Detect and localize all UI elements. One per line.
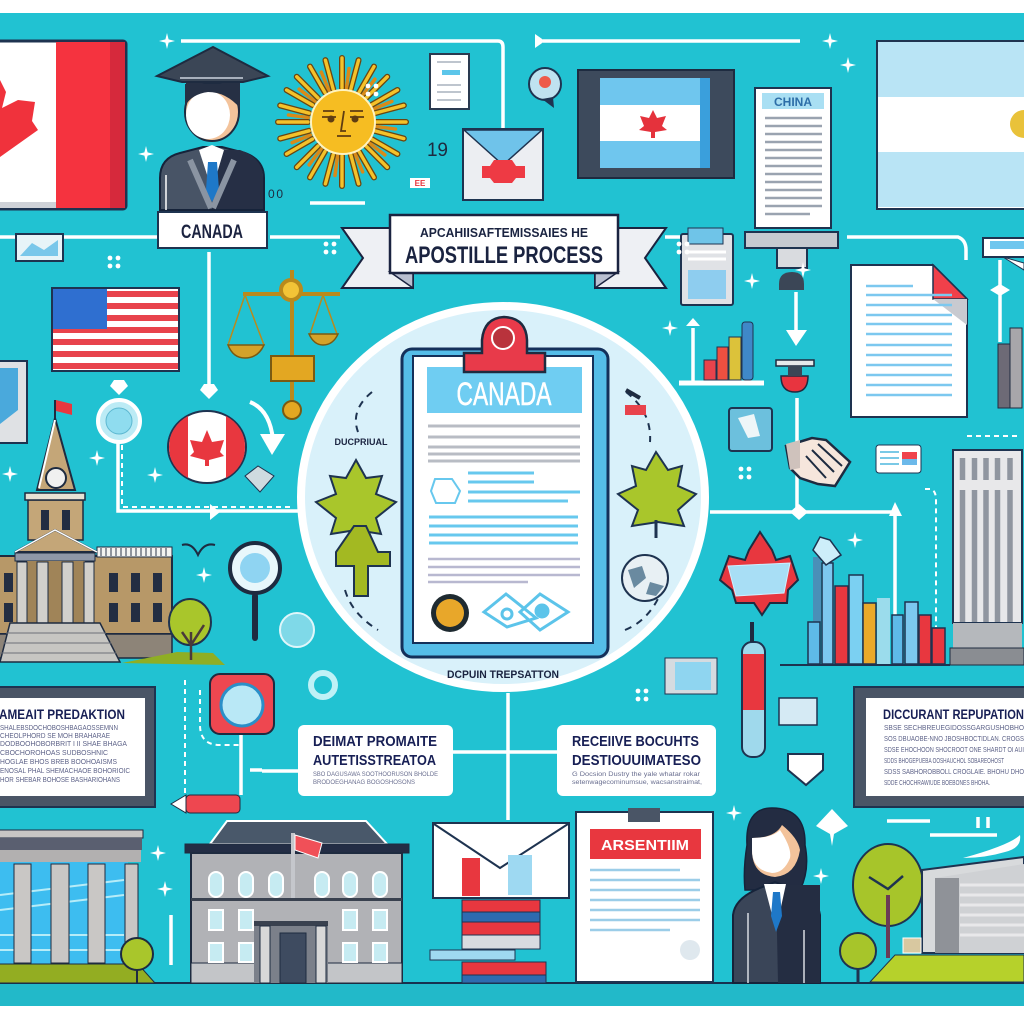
icon: dashed arcs — [345, 392, 662, 630]
icon: tree and lawn — [122, 599, 225, 665]
panel: document reputation text — [854, 687, 1024, 807]
text: stray figures: 00 — [268, 187, 283, 201]
panel: document page — [851, 265, 967, 417]
panel: document preparation text: HOR SHEBAR BOHOSE BASHARIOHANS — [0, 777, 120, 784]
icon: round bush — [121, 938, 153, 983]
icon: small document — [430, 54, 469, 109]
icon: lawn — [870, 955, 1024, 982]
icon: red tag — [625, 390, 646, 415]
panel: document on stand: CHINA — [774, 95, 812, 109]
panel: document promote text: AUTETISSTREATOA — [313, 752, 436, 769]
icon: magnifier — [230, 543, 280, 638]
panel: argentina clipboard: ARSENTIIM — [601, 837, 689, 854]
panel: argentina clipboard — [576, 808, 713, 982]
icon: embassy building — [185, 821, 409, 983]
icon: graduate figure — [157, 47, 268, 210]
clipboard clip — [464, 317, 545, 372]
panel: document promote text — [298, 725, 453, 796]
panel: document preparation text: ENOSAL PHAL SHEMACHAOE BOHORIOIC — [0, 768, 130, 775]
label: small red tag — [410, 178, 430, 188]
icon: location badge — [529, 68, 561, 108]
panel: clipboard document — [402, 317, 608, 657]
icon: books stack — [430, 900, 546, 983]
icon: gold seal — [431, 594, 469, 632]
panel: canada flag — [0, 41, 126, 209]
panel: document preparation text: SHALEBSDOCHOBOSHBAGAOSSEMNN — [0, 725, 118, 732]
panel: tower building — [950, 450, 1024, 665]
icon: sun of may — [278, 58, 406, 186]
icon: left maple leaf — [316, 460, 396, 596]
icon: scales of justice — [228, 270, 340, 419]
icon: government building with stairs — [0, 400, 172, 662]
icon: small globe — [280, 613, 314, 647]
icon: small diamond — [245, 466, 274, 492]
label: canada nameplate — [158, 212, 267, 248]
icon: small map card — [16, 234, 63, 261]
banner: canada — [427, 367, 582, 413]
icon: globe node — [98, 400, 140, 442]
panel: receive documents text: DESTIOUUIMATESO — [572, 752, 701, 769]
panel: document promote text: DEIMAT PROMAITE — [313, 733, 437, 750]
icon: map tile — [729, 408, 772, 451]
panel: receive documents text: setenwagecominumsue, wacsanstraimat, — [572, 779, 702, 786]
panel: document preparation text: CBOCHOROHOAS SUDBOSHNIC — [0, 750, 108, 757]
icon: right maple leaf — [618, 452, 696, 538]
icon: globe — [622, 555, 668, 601]
text lines — [428, 426, 580, 582]
panel: argentina flag — [877, 41, 1024, 209]
icon: top right machine — [983, 238, 1024, 270]
icon: id card — [876, 445, 921, 473]
icon: clipboard small — [681, 228, 733, 305]
panel: document preparation text: DODBOOHOBORBRIT I II SHAE BHAGA — [0, 741, 127, 748]
decorative sparkles — [2, 33, 863, 897]
panel: receive documents text: RECEIIVE BOCUHTS — [572, 733, 699, 750]
icon: handshake — [786, 438, 850, 486]
icon: camera badge — [210, 674, 274, 734]
panel: document preparation text: HOGLAE BHOS BREB BOOHOAISMS — [0, 759, 117, 766]
icon: right tree — [853, 844, 923, 958]
icon: modern building — [903, 857, 1024, 953]
icon: small seal — [776, 360, 814, 392]
panel: receive documents text: G Docsion Dustry the yale whatar rokar — [572, 771, 701, 778]
icon: stacked card — [665, 658, 717, 694]
heading: apostille ribbon: APCAHIISAFTEMISSAIES HE — [420, 225, 588, 240]
panel: document promote text: SBO DAGUSAWA SOOTHOORUSON BHOLDE — [313, 771, 439, 778]
icon: canada leaf banner — [720, 532, 798, 615]
icon: businesswoman — [733, 808, 820, 983]
icon: picture frame — [0, 361, 27, 443]
label: diagram caption left: DUCPRIUAL — [334, 437, 388, 447]
chart: red and blue bars — [780, 537, 950, 665]
text: stray figures: 19 — [427, 140, 448, 161]
label: canada nameplate: CANADA — [181, 222, 243, 243]
label: small red tag: EE — [415, 179, 426, 188]
icon: bar chart small — [679, 322, 764, 383]
banner: canada: CANADA — [456, 376, 552, 412]
icon: envelope large — [433, 823, 569, 898]
panel: document preparation text: CHEOLPHORD SE MOH BRAHARAE — [0, 733, 110, 740]
panel: document preparation text — [0, 687, 155, 807]
icon: grey bars — [998, 328, 1022, 408]
panel: document preparation text: AMEAIT PREDAKTION — [0, 706, 125, 722]
icon: mail shield — [779, 698, 823, 785]
icon: diamond marks — [484, 594, 568, 630]
icon: argentina flag tablet — [578, 70, 734, 178]
panel: receive documents text — [557, 725, 716, 796]
panel: central circle — [301, 306, 705, 688]
icon: curved arrow — [250, 402, 285, 455]
icon: target node — [311, 673, 335, 697]
icon: pencil — [171, 795, 240, 813]
heading: apostille ribbon — [342, 215, 666, 288]
caption: document preparation: DCPUIN TREPSATTON — [447, 669, 559, 681]
heading: apostille ribbon: APOSTILLE PROCESS — [405, 242, 603, 269]
panel: document on stand — [745, 88, 838, 290]
icon: red pen — [742, 622, 765, 757]
panel: document promote text: BRODOEGHANAG BOGOSHOSONS — [313, 779, 416, 786]
icon: bird mark — [182, 544, 215, 555]
text: stray figures — [268, 140, 448, 201]
icon: envelope — [463, 129, 543, 200]
icon: canada coin — [168, 411, 246, 483]
icon: usa flag — [52, 288, 179, 371]
icon: small tree — [840, 933, 876, 984]
icon: columned hall — [0, 830, 155, 983]
icon: octagon badge — [431, 479, 460, 503]
